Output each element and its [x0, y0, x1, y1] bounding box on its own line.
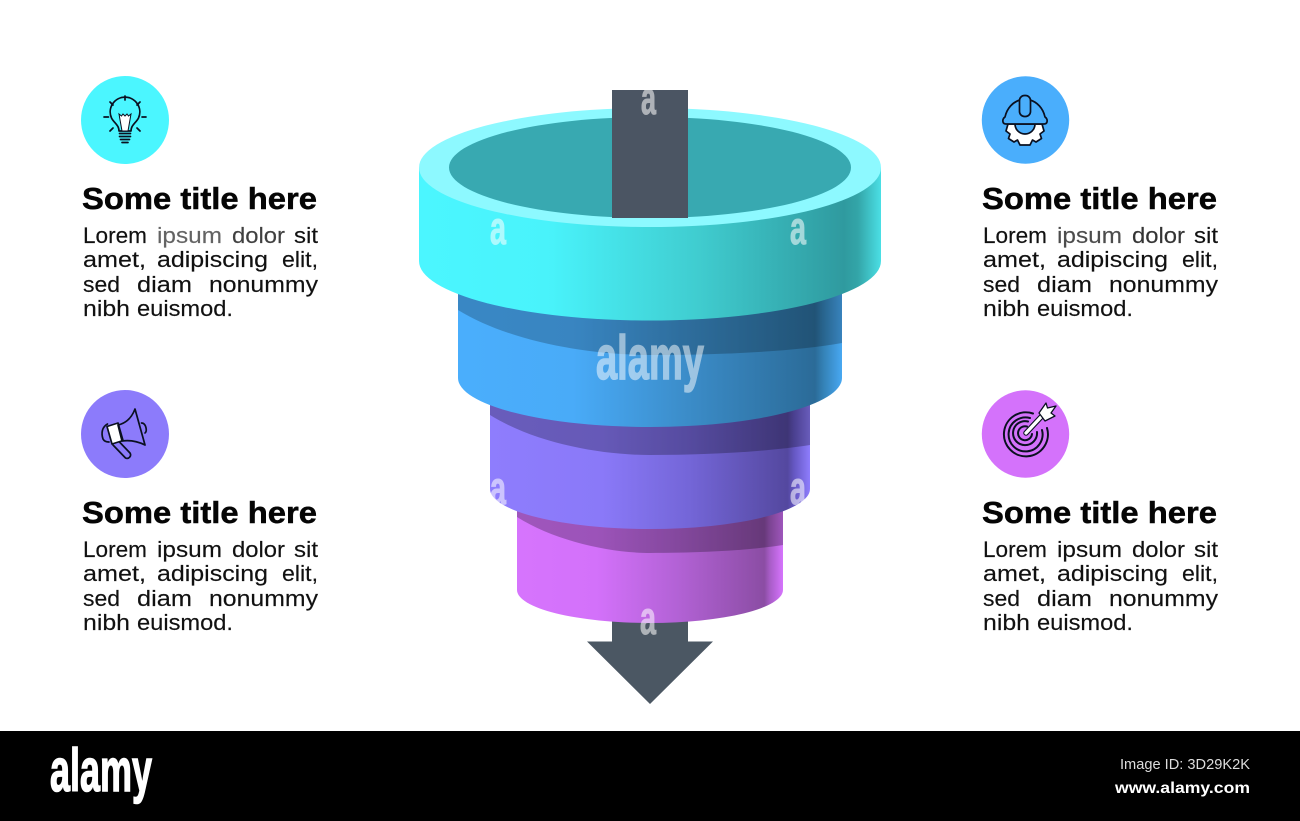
image id: Image ID: 3D29K2K [1120, 756, 1250, 773]
arrow: top inlet stem [612, 90, 688, 218]
text block: ipsum [157, 223, 222, 248]
text block: adipiscing [157, 247, 268, 272]
text block: nibh [83, 610, 130, 635]
text block: adipiscing [1057, 247, 1168, 272]
text block: elit, [282, 247, 318, 272]
text block: nonummy [1109, 272, 1219, 297]
text block: nonummy [209, 586, 319, 611]
icon: megaphone [81, 390, 169, 478]
funnel layer 1: cyan top ring [419, 108, 881, 320]
text block: ipsum [1057, 223, 1122, 248]
text block: diam [137, 272, 192, 297]
heading: Some title here [82, 495, 317, 530]
text block: Lorem [983, 223, 1047, 248]
text block: Lorem [83, 537, 147, 562]
watermarks: a [641, 72, 656, 124]
footer bar [0, 731, 1300, 821]
text block: euismod. [1037, 296, 1133, 321]
text block: amet, [83, 247, 146, 272]
watermarks: a [490, 462, 506, 514]
text block: diam [137, 586, 192, 611]
watermarks: a [490, 202, 506, 254]
step 3: engineering [982, 76, 1219, 321]
text block: elit, [1182, 247, 1218, 272]
funnel diagram [419, 90, 881, 704]
text block: nibh [983, 610, 1030, 635]
text block: adipiscing [1057, 561, 1168, 586]
text block: diam [1037, 272, 1092, 297]
text block: amet, [83, 561, 146, 586]
text block: dolor [1132, 223, 1186, 248]
text block [83, 223, 319, 321]
watermarks: a [790, 462, 806, 514]
text block: amet, [983, 561, 1046, 586]
text block: elit, [282, 561, 318, 586]
text block [983, 537, 1219, 635]
text block: ipsum [157, 537, 222, 562]
text block [983, 223, 1219, 321]
text block: Lorem [983, 537, 1047, 562]
step 2: marketing [81, 390, 319, 635]
funnel layer 3: violet [490, 395, 810, 529]
text block [83, 537, 319, 635]
text block: sit [294, 223, 319, 248]
text block: sit [1194, 223, 1219, 248]
text block: sed [983, 586, 1020, 611]
heading: Some title here [82, 181, 317, 216]
footer logo: alamy [50, 737, 152, 804]
icon: light bulb [81, 76, 169, 164]
icon: hard hat and gear [982, 76, 1069, 164]
text block: nibh [983, 296, 1030, 321]
text block: dolor [1132, 537, 1186, 562]
text block: diam [1037, 586, 1092, 611]
funnel layer 4: magenta [517, 500, 783, 623]
text block: dolor [232, 537, 286, 562]
text block: ipsum [1057, 537, 1122, 562]
step 4: target [982, 390, 1219, 635]
watermarks: a [790, 202, 806, 254]
text block: euismod. [1037, 610, 1133, 635]
step 1: idea [81, 76, 319, 321]
text block: sit [1194, 537, 1219, 562]
watermarks [490, 72, 806, 644]
text block: nonummy [209, 272, 319, 297]
text block: sed [83, 586, 120, 611]
text block: adipiscing [157, 561, 268, 586]
heading: Some title here [982, 495, 1217, 530]
text block: euismod. [137, 610, 233, 635]
arrow: bottom outlet pointing down [587, 610, 713, 704]
text block: euismod. [137, 296, 233, 321]
watermarks: alamy [596, 324, 704, 393]
heading: Some title here [982, 181, 1217, 216]
text block: sed [983, 272, 1020, 297]
website: www.alamy.com [1114, 780, 1250, 797]
text block: nibh [83, 296, 130, 321]
text block: nonummy [1109, 586, 1219, 611]
text block: sit [294, 537, 319, 562]
funnel layer 2: blue [458, 285, 842, 427]
text block: elit, [1182, 561, 1218, 586]
icon: target with arrow [982, 390, 1069, 478]
text block: sed [83, 272, 120, 297]
watermarks: a [640, 592, 656, 644]
text block: Lorem [83, 223, 147, 248]
text block: dolor [232, 223, 286, 248]
text block: amet, [983, 247, 1046, 272]
